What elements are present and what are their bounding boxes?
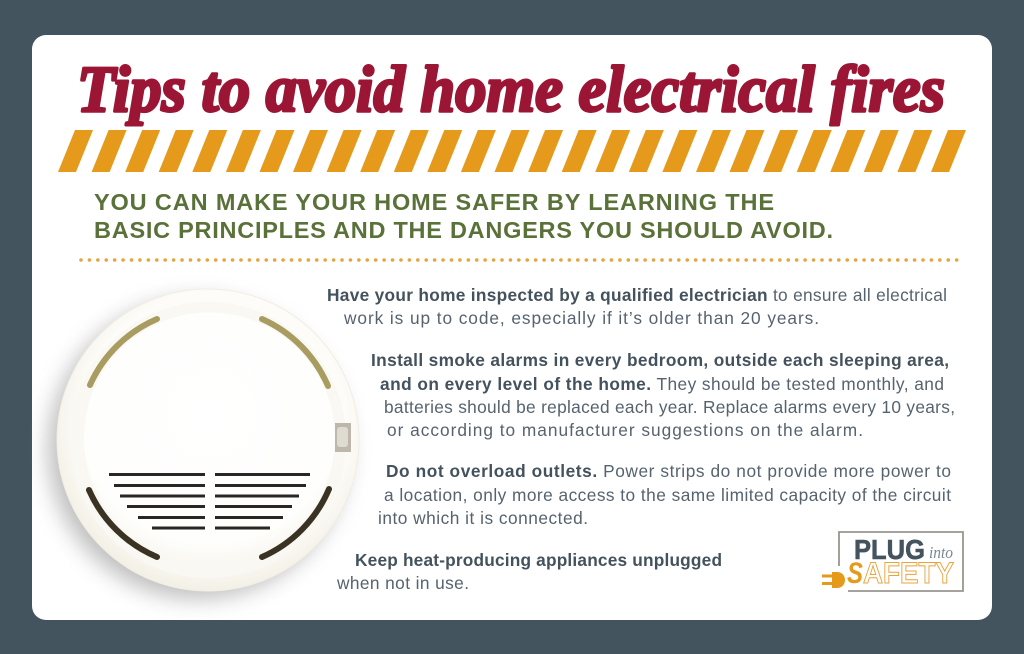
hazard stripes band [58, 130, 966, 172]
tip 3 text [378, 461, 951, 528]
alarm vents [109, 473, 310, 530]
tip 3 text: Do not overload outlets. Power strips do not provide more power to [386, 461, 951, 481]
subheading: BASIC PRINCIPLES AND THE DANGERS YOU SHOULD AVOID. [94, 217, 833, 243]
tip 4 text: when not in use. [336, 573, 469, 593]
tip 2 text: Install smoke alarms in every bedroom, outside each sleeping area, [371, 350, 949, 370]
tip 4 text [336, 550, 722, 593]
tip 4 text: Keep heat-producing appliances unplugged [355, 550, 722, 570]
alarm cover disc [84, 312, 335, 564]
logo: Plug into Safety: S [847, 557, 863, 590]
logo: Plug into Safety: AFETY [863, 557, 954, 590]
alarm base [57, 289, 359, 591]
logo: Plug into Safety: PLUG [854, 534, 925, 565]
alarm slots [89, 319, 329, 557]
tip 2 text: and on every level of the home. They should be tested monthly, and [380, 374, 944, 394]
tip 1 text [327, 285, 947, 328]
tip 3 text: into which it is connected. [378, 508, 588, 528]
title: Tips to avoid home electrical fires [77, 53, 945, 126]
alarm test button [335, 423, 351, 452]
subheading [94, 189, 833, 243]
tip 2 text: or according to manufacturer suggestions on the alarm. [387, 420, 863, 440]
tip 3 text: a location, only more access to the same limited capacity of the circuit [384, 485, 951, 505]
logo: Plug into Safety [822, 532, 963, 591]
tip 1 text: work is up to code, especially if it’s older than 20 years. [343, 308, 819, 328]
icon: plug [822, 572, 845, 588]
tip 2 text [371, 350, 955, 440]
tip 2 text: batteries should be replaced each year. Replace alarms every 10 years, [384, 397, 955, 417]
tip 1 text: Have your home inspected by a qualified electrician to ensure all electrical [327, 285, 947, 305]
subheading: YOU CAN MAKE YOUR HOME SAFER BY LEARNING THE [94, 189, 774, 215]
smoke alarm illustration [48, 289, 359, 599]
logo: Plug into Safety: into [929, 543, 953, 562]
